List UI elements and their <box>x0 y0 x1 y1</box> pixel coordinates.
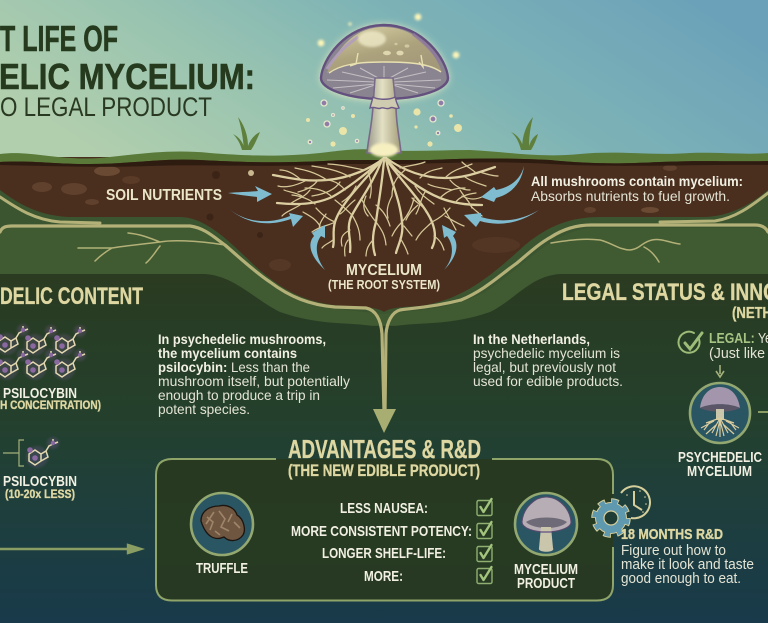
icon: clock <box>621 486 650 518</box>
list: advantages <box>291 500 472 585</box>
text: psilocybin in mycelium <box>158 331 350 417</box>
text: 18 months r&d: make it look and taste <box>621 557 754 573</box>
list: advantages: MORE: <box>364 568 403 585</box>
label: psilocybin high concentration: H CONCENTRATION) <box>0 398 101 412</box>
text: psilocybin in mycelium: the mycelium contains <box>158 345 297 361</box>
stem <box>367 78 401 153</box>
sky background <box>0 0 768 175</box>
mushroom <box>321 25 448 157</box>
label: psilocybin less: (10-20x LESS) <box>5 487 75 501</box>
title: ELIC MYCELIUM: <box>0 56 255 97</box>
text: netherlands: In the Netherlands, <box>473 331 590 347</box>
text: netherlands: used for edible products. <box>473 373 623 389</box>
title <box>0 18 255 122</box>
label: mycelium root system: MYCELIUM <box>346 262 422 279</box>
icon: grass tuft left <box>233 117 260 150</box>
icon: psychedelic mycelium <box>690 383 750 443</box>
callout: all mushrooms contain mycelium: Absorbs nutrients to fuel growth. <box>531 188 730 204</box>
grass band <box>0 149 768 164</box>
text: legal yes <box>709 331 768 362</box>
heading: advantages: (THE NEW EDIBLE PRODUCT) <box>288 461 480 480</box>
icon: grass tuft right <box>511 117 538 150</box>
text: 18 months r&d: 18 MONTHS R&D <box>621 526 723 543</box>
spores <box>306 14 462 147</box>
panel: advantages <box>156 459 613 600</box>
label: psychedelic mycelium <box>678 449 762 480</box>
callout: all mushrooms contain mycelium: All mushrooms contain mycelium: <box>531 173 743 189</box>
text: psilocybin in mycelium: In psychedelic mushrooms, <box>158 331 326 347</box>
title: T LIFE OF <box>0 18 118 59</box>
label: soil nutrients: SOIL NUTRIENTS <box>106 187 222 204</box>
connector lines <box>0 193 768 412</box>
text: netherlands <box>473 331 623 389</box>
text: 18 months r&d: good enough to eat. <box>621 571 741 587</box>
connector: mycelium to right <box>758 411 768 413</box>
label: mycelium product <box>514 561 578 592</box>
label: truffle: TRUFFLE <box>196 560 248 577</box>
text: netherlands: legal, but previously not <box>473 359 616 375</box>
arrows: nutrients into roots <box>228 166 539 270</box>
label: psychedelic mycelium: MYCELIUM <box>687 463 752 480</box>
list: advantages: LESS NAUSEA: <box>340 500 428 517</box>
text: psilocybin in mycelium: enough to produce a trip in <box>158 387 320 403</box>
label: mycelium product: MYCELIUM <box>514 561 578 578</box>
mycelium roots <box>273 158 498 256</box>
heading: psychedelic content: DELIC CONTENT <box>0 283 143 310</box>
label: psilocybin high concentration <box>0 385 101 412</box>
callout: all mushrooms contain mycelium <box>531 173 743 204</box>
arrow: down to advantages <box>373 409 396 433</box>
heading: advantages: ADVANTAGES & R&D <box>288 434 481 464</box>
heading: legal status <box>562 279 768 322</box>
text: 18 months r&d: Figure out how to <box>621 543 726 559</box>
icon: single molecule with bracket <box>3 437 59 468</box>
glow <box>321 25 448 100</box>
label: psilocybin less: PSILOCYBIN <box>3 473 77 490</box>
text: psilocybin in mycelium: mushroom itself, but potentially <box>158 373 350 389</box>
icon: legal check <box>679 332 702 353</box>
checkmarks <box>477 499 492 584</box>
label: mycelium root system <box>328 262 440 292</box>
label: mycelium root system: (THE ROOT SYSTEM) <box>328 277 440 292</box>
green band under soil <box>0 190 768 623</box>
text: 18 months r&d <box>621 526 754 587</box>
title: O LEGAL PRODUCT <box>0 92 212 122</box>
label: psilocybin less <box>3 473 77 501</box>
icon: mycelium product <box>515 493 577 555</box>
text: legal yes: (Just like <box>709 346 765 362</box>
arrow: legal to mycelium <box>716 365 724 377</box>
cap underside <box>321 25 448 99</box>
icon: gear <box>595 502 627 534</box>
arrow: to advantages panel <box>0 545 141 553</box>
heading: advantages <box>288 434 481 480</box>
icon: truffle <box>191 493 253 555</box>
cap <box>327 27 442 73</box>
text: netherlands: psychedelic mycelium is <box>473 345 620 361</box>
soil layer <box>0 157 768 322</box>
text: psilocybin in mycelium: psilocybin: Less than the <box>158 359 310 375</box>
list: advantages: LONGER SHELF-LIFE: <box>322 545 446 562</box>
dark lower panel <box>0 274 768 623</box>
list: advantages: MORE CONSISTENT POTENCY: <box>291 523 472 540</box>
icon: psilocybin molecule cluster <box>0 324 86 380</box>
label: psilocybin high concentration: PSILOCYBIN <box>3 385 77 402</box>
ring <box>370 97 399 109</box>
text: psilocybin in mycelium: potent species. <box>158 401 250 417</box>
soil dark top edge <box>0 158 768 167</box>
label: mycelium product: PRODUCT <box>517 575 575 592</box>
